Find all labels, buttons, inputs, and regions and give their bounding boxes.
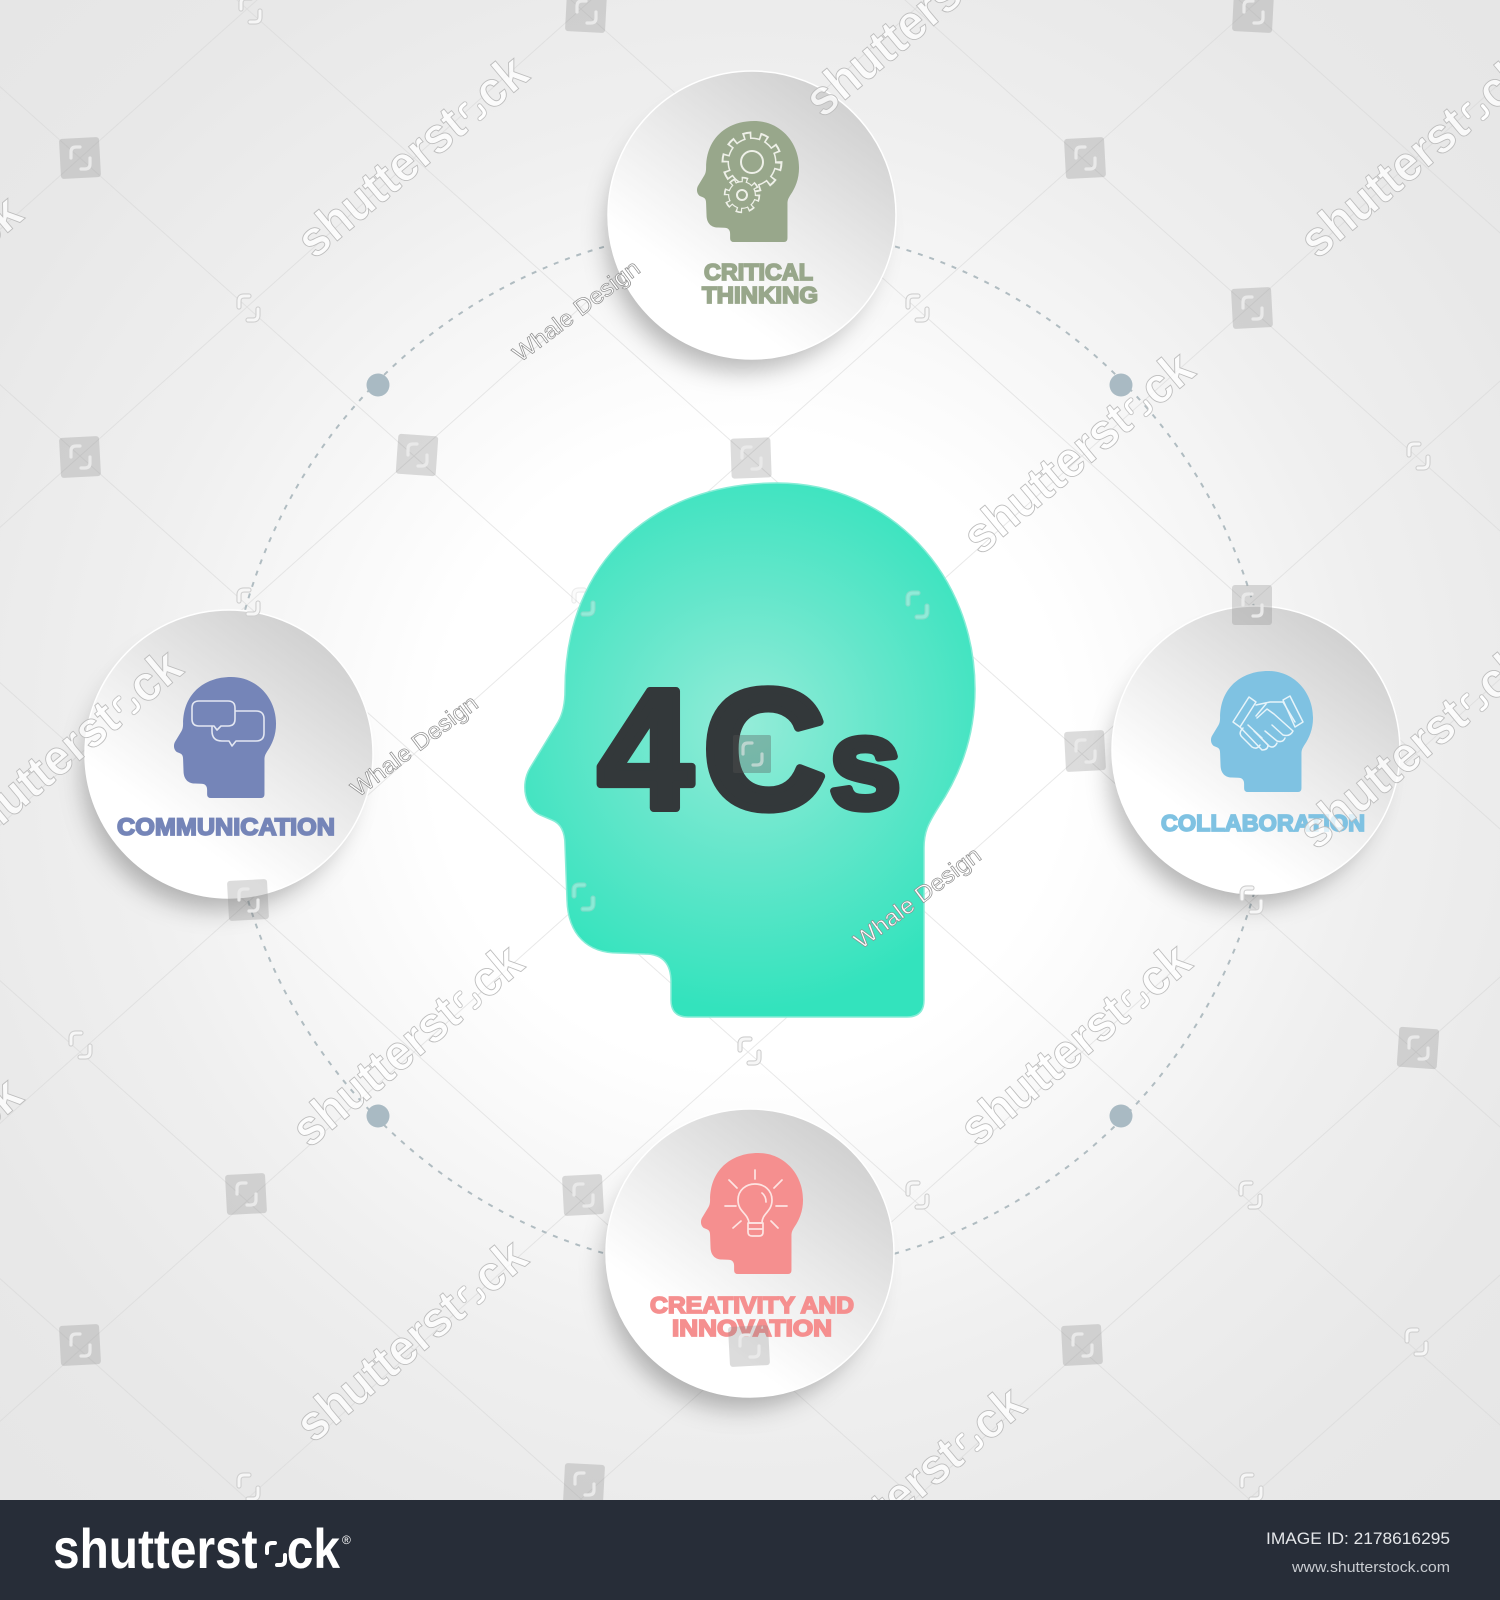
label: critical thinking: THINKING — [702, 282, 818, 308]
panel: communication — [83, 610, 373, 910]
panel: collaboration — [1110, 606, 1400, 906]
panel: creativity and innovation — [604, 1109, 894, 1409]
watermark: shutterstock marks: shutterstock — [949, 931, 1202, 1156]
label: communication: COMMUNICATION — [117, 814, 335, 841]
label: critical thinking — [702, 259, 818, 308]
watermark: shutterstock marks: shutterstock — [281, 932, 534, 1157]
watermark: author marks: Whale Design — [849, 841, 986, 954]
image id: IMAGE ID: 2178616295 — [1266, 1529, 1450, 1548]
footer bar — [0, 1500, 1500, 1600]
watermark: author marks: Whale Design — [508, 254, 645, 367]
title: 4Cs: s — [829, 690, 901, 836]
website: www.shutterstock.com — [1291, 1559, 1450, 1576]
label: creativity and innovation: CREATIVITY AND — [650, 1292, 854, 1318]
label: creativity and innovation — [650, 1292, 854, 1341]
watermark: shutterstock marks: shutterstock — [285, 1227, 538, 1452]
footer logo: shutterstock — [53, 1517, 341, 1580]
title: 4Cs: 4 — [598, 655, 693, 845]
dashed ring with connector dots — [226, 226, 1274, 1274]
watermark: shutterstock marks: shutterstock — [783, 1374, 1036, 1599]
label: collaboration: COLLABORATION — [1161, 810, 1365, 836]
watermark: author marks — [346, 254, 986, 954]
watermark: shutterstock marks: shutterstock — [952, 339, 1205, 564]
title: 4Cs: C — [703, 655, 826, 845]
watermark: author marks: Whale Design — [346, 689, 483, 802]
label: critical thinking: CRITICAL — [704, 259, 813, 285]
panel: critical thinking — [606, 71, 896, 371]
label: creativity and innovation: INNOVATION — [672, 1315, 832, 1341]
footer logo: ® — [342, 1533, 351, 1547]
watermark: shutterstock marks: shutterstock — [286, 43, 539, 268]
central head: 4Cs — [525, 483, 975, 1017]
